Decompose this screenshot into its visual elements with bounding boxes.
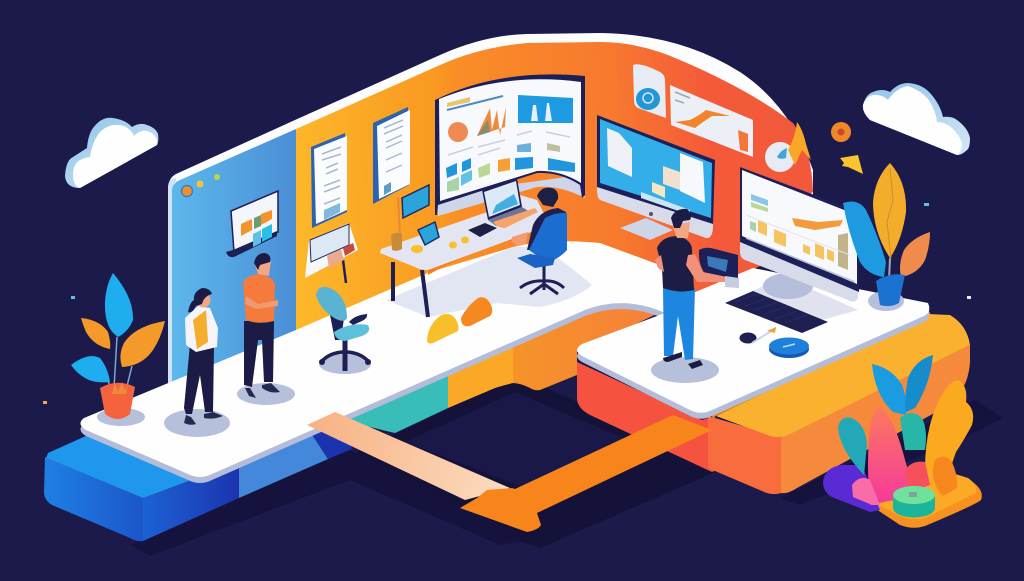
arms — [245, 296, 278, 309]
block left face — [44, 457, 143, 541]
chart card — [518, 95, 573, 123]
floating arrow — [840, 155, 863, 174]
orange right leaf — [120, 321, 165, 367]
ground shadows — [130, 375, 1003, 556]
red front face — [577, 362, 717, 472]
yellow notes — [411, 245, 423, 253]
yellow top face — [716, 314, 970, 437]
notepad — [725, 276, 739, 288]
yellow and orange desk blobs — [427, 297, 492, 344]
plant right — [843, 163, 930, 306]
chair seat — [517, 254, 555, 268]
monitor two — [597, 115, 715, 240]
pot — [100, 383, 135, 419]
pot — [876, 274, 905, 306]
shirt — [657, 236, 694, 292]
block top face — [46, 435, 200, 498]
orange right face — [781, 345, 970, 493]
keyboard — [725, 291, 828, 333]
blue top leaf — [105, 273, 133, 337]
block right face — [143, 462, 239, 541]
light blue side — [239, 430, 328, 498]
orange side panel — [513, 305, 665, 390]
wall graph card — [670, 85, 753, 157]
cloud right — [863, 83, 970, 155]
yellow side panel — [448, 345, 513, 408]
wall edge — [168, 178, 176, 387]
left blue block — [44, 418, 352, 541]
monitor frame — [435, 74, 585, 215]
monitor screen — [439, 79, 581, 201]
back wall — [168, 33, 813, 390]
desk top — [380, 195, 550, 270]
man in orange — [243, 253, 280, 398]
keyboard — [468, 223, 497, 237]
teal left leaf — [838, 417, 867, 475]
coral front face — [708, 416, 781, 494]
orange tray — [493, 208, 538, 228]
wall orange section — [296, 42, 813, 335]
man at desk — [655, 209, 739, 369]
orange leaf — [900, 232, 930, 277]
chair base — [520, 262, 564, 294]
orange small leaf — [933, 456, 957, 496]
pink small — [852, 478, 880, 505]
laptop deck — [488, 207, 530, 226]
chair back — [316, 287, 347, 321]
big curved monitor — [435, 74, 585, 216]
wall document 2 — [373, 107, 410, 204]
code cards — [607, 128, 632, 177]
accent dots — [43, 203, 971, 404]
blue leaves — [872, 364, 906, 415]
bottom right plant cluster — [823, 355, 982, 528]
chair seat — [334, 324, 369, 341]
cloud left — [65, 118, 158, 188]
desk floor shadow — [386, 246, 592, 317]
desk monitor — [740, 167, 860, 320]
green cylinder — [893, 498, 935, 518]
blue disc — [769, 338, 809, 358]
dark tablet — [699, 248, 738, 282]
floating coin — [831, 122, 851, 142]
blue leaf — [843, 202, 886, 277]
orange edge line — [712, 313, 930, 416]
right block — [577, 313, 970, 494]
wall document 1 — [311, 133, 347, 228]
floor edge — [80, 247, 929, 483]
head — [254, 260, 271, 276]
left wall screen — [226, 191, 278, 257]
wall book stand — [305, 223, 358, 283]
chair back — [529, 213, 567, 263]
dark blue side — [309, 418, 352, 459]
shirt — [243, 274, 275, 323]
arm — [686, 254, 727, 282]
head — [196, 292, 210, 308]
wall disc and flame — [765, 122, 811, 172]
blue left leaf — [71, 356, 110, 382]
laptop — [482, 178, 522, 220]
monitor base lip — [437, 175, 585, 216]
wall blue section — [168, 129, 296, 388]
desk — [380, 178, 552, 317]
plant base — [873, 470, 982, 528]
wall card circle — [633, 64, 666, 118]
stand — [753, 276, 858, 320]
seated worker and chair — [512, 188, 567, 294]
woman — [184, 288, 223, 425]
chair on floor — [316, 287, 371, 371]
peach arrow band — [307, 412, 510, 500]
chair arm — [349, 314, 367, 325]
yellow leaf — [873, 163, 906, 258]
plant left — [71, 273, 165, 419]
screen — [742, 170, 857, 284]
cup — [398, 197, 400, 235]
teal side panel — [340, 375, 448, 433]
orange arrow — [460, 415, 712, 532]
head — [672, 222, 690, 238]
tablet — [418, 222, 439, 245]
yellow feather — [925, 380, 973, 475]
jeans — [663, 287, 695, 360]
purple base — [823, 465, 880, 512]
chin — [740, 236, 858, 302]
wall white top band — [168, 33, 813, 390]
vest — [193, 310, 208, 349]
teal leaf back — [900, 413, 926, 450]
wall tablet — [402, 185, 429, 218]
status dots — [182, 174, 220, 196]
pink big leaf — [868, 406, 910, 505]
worker body — [527, 208, 566, 250]
mouse and pen — [740, 327, 776, 344]
worker head — [537, 188, 558, 207]
desk underside — [428, 224, 552, 275]
floor shadows — [97, 291, 904, 437]
floor white surface — [80, 241, 929, 477]
orange left leaf — [81, 318, 110, 349]
shirt — [185, 306, 218, 352]
